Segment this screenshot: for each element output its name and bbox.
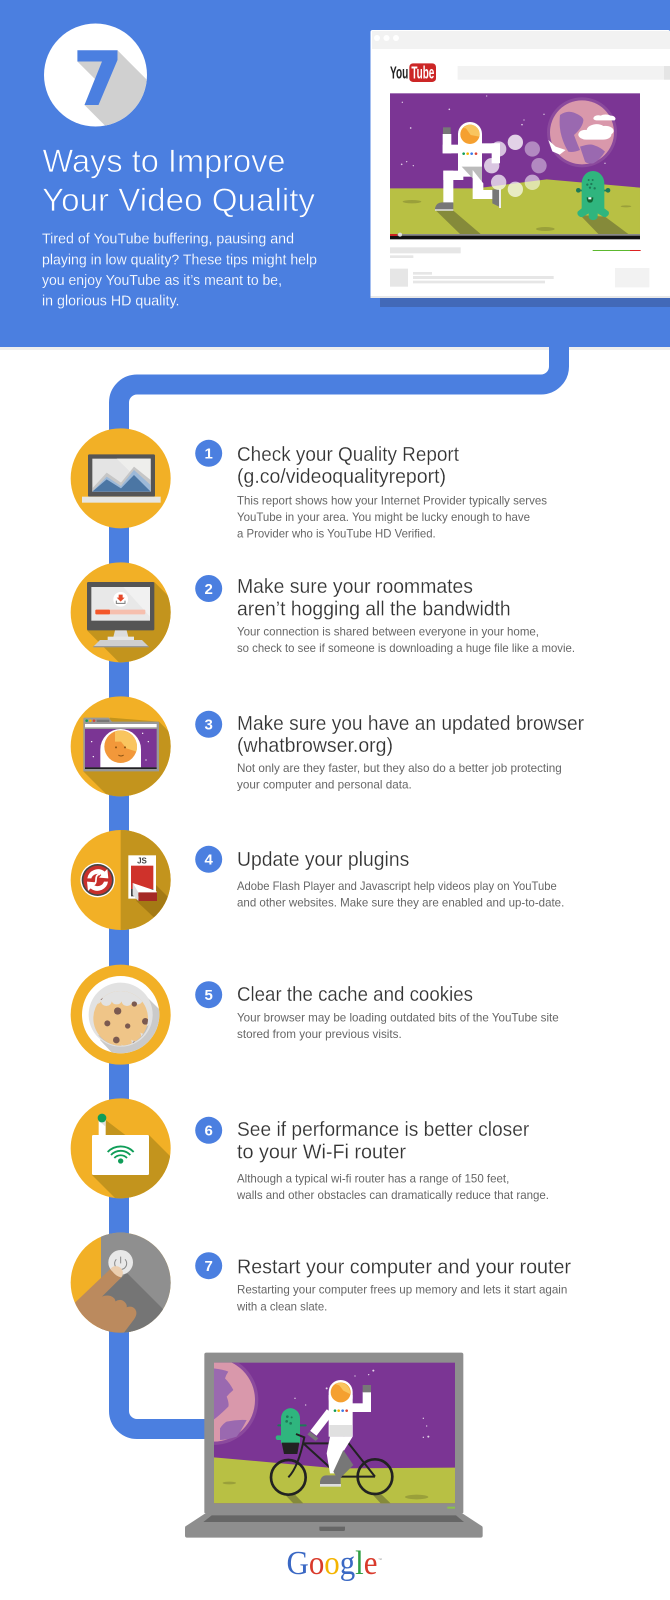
- video frame: astronaut on the moon: [390, 93, 649, 287]
- Google logo: ™: [378, 1557, 382, 1562]
- step 3 text: [237, 712, 584, 792]
- step 7 text: with a clean slate.: [236, 1299, 327, 1313]
- step 2 text: [237, 575, 575, 655]
- step 3 text: Make sure you have an updated browser: [237, 712, 584, 735]
- intro text: Tired of YouTube buffering, pausing and: [42, 232, 294, 248]
- step 1 badge: 1: [205, 446, 213, 463]
- step 2 badge: [195, 575, 222, 602]
- step 6 badge: [195, 1117, 222, 1144]
- intro text: in glorious HD quality.: [42, 294, 180, 310]
- step 2 text: Make sure your roommates: [237, 575, 473, 598]
- step 2 badge: 2: [205, 581, 213, 598]
- header band: [0, 0, 670, 350]
- laptop illustration: astronaut on a bike: [168, 1353, 483, 1538]
- step 4 text: Update your plugins: [237, 848, 409, 871]
- step 3 icon: browser window: [70, 696, 171, 796]
- step 4 icon: flash and javascript plugins: JS: [137, 856, 148, 865]
- intro text: you enjoy YouTube as it’s meant to be,: [42, 273, 282, 289]
- step 1 text: (g.co/videoqualityreport): [237, 465, 446, 488]
- step 7 text: Restarting your computer frees up memory and lets it start again: [237, 1283, 567, 1297]
- step 3 badge: [195, 711, 222, 738]
- step 5 text: Your browser may be loading outdated bits of the YouTube site: [237, 1010, 559, 1024]
- step 4 text: and other websites. Make sure they are enabled and up-to-date.: [237, 896, 564, 910]
- step 4 icon: flash and javascript plugins: [71, 827, 174, 933]
- Google logo: Google: [286, 1545, 378, 1582]
- step 5 text: [237, 983, 559, 1041]
- step 5 badge: 5: [205, 987, 213, 1004]
- step 5 icon: cookie: [70, 964, 171, 1065]
- step 6 icon: wi-fi router: [70, 1098, 171, 1198]
- step 3 text: Not only are they faster, but they also do a better job protecting: [237, 761, 562, 775]
- step 1 text: Check your Quality Report: [237, 443, 459, 466]
- step 2 text: aren’t hogging all the bandwidth: [237, 598, 511, 621]
- title: Your Video Quality: [42, 182, 315, 218]
- step 1 text: a Provider who is YouTube HD Verified.: [237, 527, 436, 541]
- page placeholders: [390, 247, 649, 287]
- title: Ways to Improve: [42, 143, 286, 179]
- title: [42, 143, 315, 218]
- step 4 text: Adobe Flash Player and Javascript help videos play on YouTube: [237, 879, 557, 893]
- step 5 text: stored from your previous visits.: [237, 1027, 402, 1041]
- step 4 badge: [195, 846, 222, 873]
- step 1 text: YouTube in your area. You might be lucky enough to have: [237, 510, 530, 524]
- step 3 badge: 3: [205, 717, 213, 734]
- step 7 text: Restart your computer and your router: [237, 1255, 571, 1278]
- icon: YouTube logo: Tube: [411, 63, 434, 83]
- step 3 text: your computer and personal data.: [237, 778, 412, 792]
- astronaut rider: [307, 1380, 371, 1487]
- step 1 text: [237, 443, 547, 541]
- step 6 text: Although a typical wi-fi router has a range of 150 feet,: [237, 1171, 509, 1185]
- alien: [576, 171, 610, 220]
- step 6 text: [236, 1118, 549, 1202]
- step 5 badge: [195, 981, 222, 1008]
- step 2 icon: desktop monitor downloading: [70, 562, 171, 662]
- step 5 text: Clear the cache and cookies: [237, 983, 473, 1006]
- step 2 text: Your connection is shared between everyone in your home,: [237, 625, 539, 639]
- step 7 badge: [195, 1252, 222, 1279]
- alien passenger: [276, 1408, 307, 1454]
- step 6 text: to your Wi-Fi router: [237, 1140, 406, 1163]
- step 3 text: (whatbrowser.org): [237, 734, 393, 757]
- intro text: [42, 232, 317, 310]
- connecting pipe: [119, 340, 559, 1429]
- icon: number seven badge: [44, 24, 147, 126]
- video controls: [390, 233, 640, 239]
- intro text: playing in low quality? These tips might help: [42, 253, 317, 269]
- step 1 text: This report shows how your Internet Provider typically serves: [237, 494, 547, 508]
- step 6 text: See if performance is better closer: [237, 1118, 529, 1141]
- step 7 icon: finger on power button: [70, 1232, 171, 1333]
- astronaut: [435, 122, 501, 211]
- step 1 icon: laptop with mountains: [71, 428, 171, 528]
- step 4 badge: 4: [205, 852, 214, 869]
- step 4 text: [237, 848, 564, 910]
- loading spinner: [484, 135, 547, 197]
- icon: YouTube logo: You: [390, 63, 408, 83]
- step 6 text: walls and other obstacles can dramatically reduce that range.: [236, 1188, 549, 1202]
- step 7 text: [236, 1255, 571, 1313]
- step 2 text: so check to see if someone is downloading a huge file like a movie.: [237, 641, 575, 655]
- bicycle: [271, 1434, 392, 1495]
- step 6 badge: 6: [205, 1123, 213, 1140]
- step 7 badge: 7: [205, 1258, 213, 1275]
- step 1 badge: [195, 440, 222, 467]
